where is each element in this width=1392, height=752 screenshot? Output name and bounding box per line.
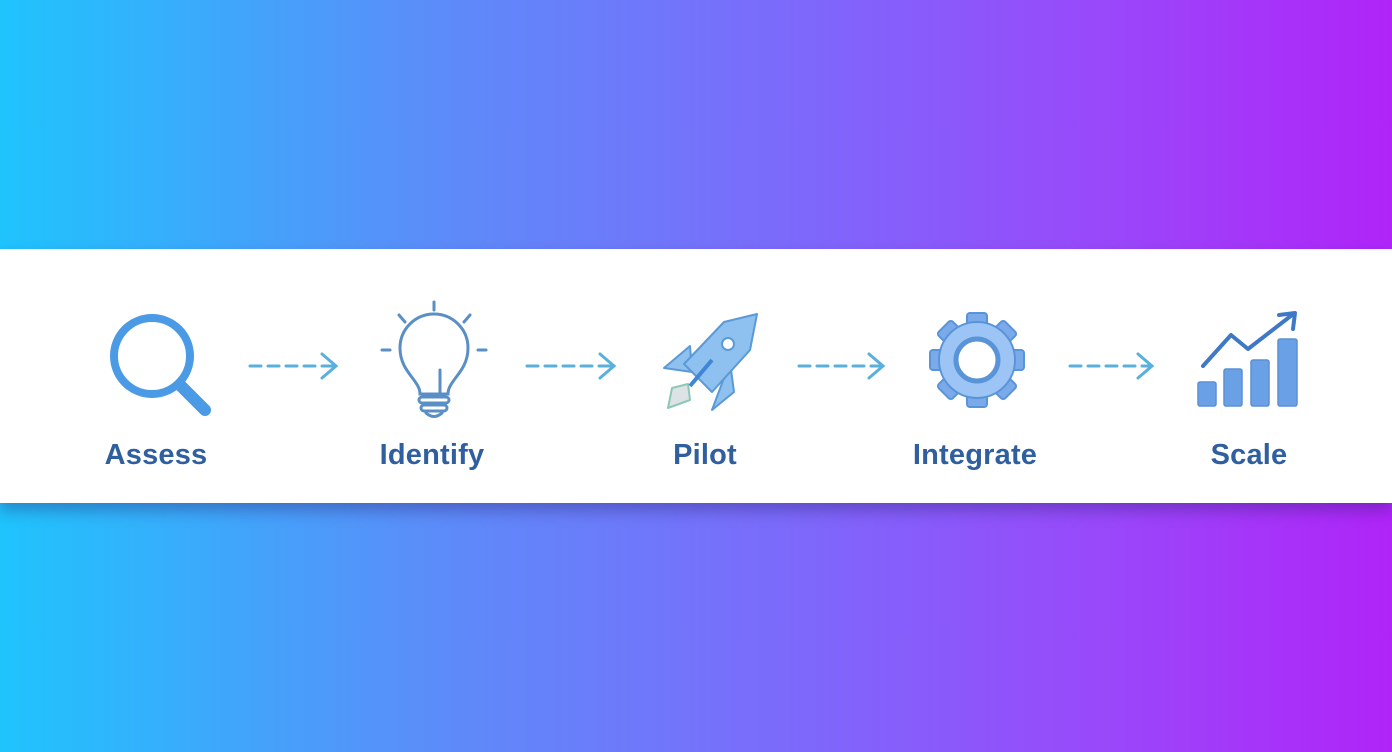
icon: light bulb — [382, 302, 486, 416]
label: Integrate: Integrate — [913, 439, 1037, 471]
label: Identify: Identify — [380, 439, 484, 471]
arrow 3 — [799, 354, 883, 378]
icon: magnifier — [114, 318, 205, 410]
icon: gear — [930, 313, 1024, 407]
icon: rocket — [664, 314, 757, 410]
arrow 1 — [250, 354, 336, 378]
icon: growth chart — [1198, 313, 1297, 406]
label: Scale: Scale — [1211, 439, 1287, 471]
label: Assess: Assess — [105, 439, 207, 471]
arrow 2 — [527, 354, 614, 378]
panel: white band — [0, 249, 1392, 503]
label: Pilot: Pilot — [673, 439, 737, 471]
arrow 4 — [1070, 354, 1152, 378]
